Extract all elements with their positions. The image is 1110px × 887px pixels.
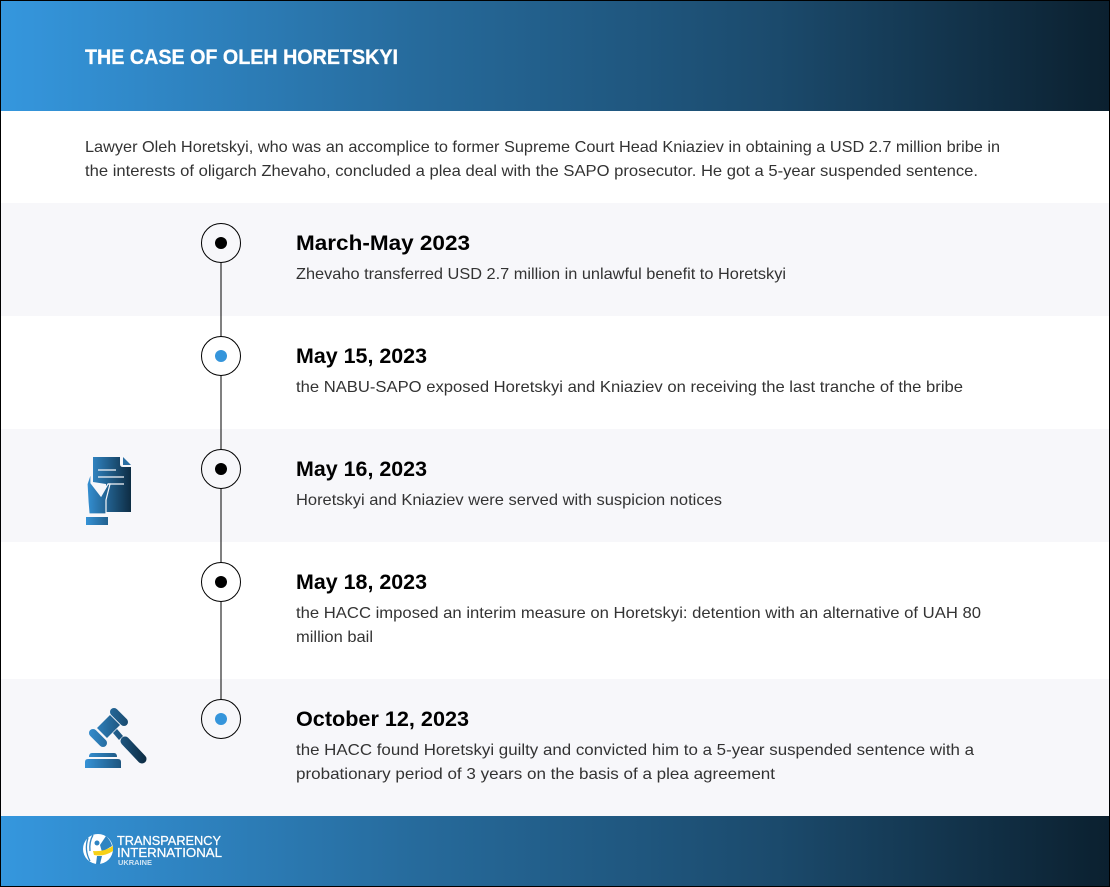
- event: March-May 2023: [296, 232, 786, 283]
- panel: header banner: [0, 0, 1110, 111]
- title: THE CASE OF OLEH HORETSKYI: [85, 46, 398, 69]
- event: March-May 2023: March-May 2023: [296, 232, 470, 255]
- panel: row backgrounds: [0, 203, 1110, 816]
- logo: Transparency International Ukraine: UKRAINE: [118, 860, 152, 867]
- intro text: [85, 139, 1000, 180]
- panel: footer banner: [0, 816, 1110, 887]
- event: May 15, 2023: [296, 345, 963, 396]
- event: May 16, 2023: [296, 458, 722, 509]
- timeline marker: May 18, 2023: [202, 562, 240, 602]
- icon: judge gavel: [85, 712, 142, 768]
- event: October 12, 2023: [296, 708, 974, 783]
- timeline marker: May 16, 2023: [202, 450, 240, 488]
- event: May 18, 2023: May 18, 2023: [296, 571, 427, 594]
- event: October 12, 2023: the HACC found Horetskyi guilty and convicted him to a 5-year suspended sentence with a: [296, 742, 974, 759]
- event: May 15, 2023: May 15, 2023: [296, 345, 427, 368]
- timeline line: [220, 243, 222, 719]
- event: May 16, 2023: Horetskyi and Kniaziev were served with suspicion notices: [296, 492, 722, 509]
- logo: Transparency International Ukraine: TRANSPARENCY: [117, 834, 222, 848]
- event: May 16, 2023: May 16, 2023: [296, 458, 427, 481]
- timeline marker: March-May 2023: [202, 224, 240, 262]
- icon: hand holding document: [86, 457, 131, 525]
- logo: Transparency International Ukraine: [83, 834, 222, 867]
- timeline marker: May 15, 2023: [202, 336, 240, 376]
- event: May 18, 2023: million bail: [296, 629, 373, 646]
- event: May 18, 2023: the HACC imposed an interim measure on Horetskyi: detention with an alternative of UAH 80: [296, 605, 981, 622]
- event: May 18, 2023: [296, 571, 981, 646]
- event: May 15, 2023: the NABU-SAPO exposed Horetskyi and Kniaziev on receiving the last tranche of the bribe: [296, 379, 963, 396]
- logo: Transparency International Ukraine: INTERNATIONAL: [117, 846, 222, 860]
- intro text: the interests of oligarch Zhevaho, concluded a plea deal with the SAPO prosecutor. He got a 5-year suspended sentence.: [85, 163, 978, 180]
- event: October 12, 2023: probationary period of 3 years on the basis of a plea agreement: [296, 766, 776, 783]
- event: October 12, 2023: October 12, 2023: [296, 708, 469, 731]
- timeline marker: October 12, 2023: [202, 700, 240, 738]
- event: March-May 2023: Zhevaho transferred USD 2.7 million in unlawful benefit to Horetskyi: [296, 266, 786, 283]
- intro text: Lawyer Oleh Horetskyi, who was an accomplice to former Supreme Court Head Kniaziev in obtaining a USD 2.7 million bribe in: [85, 139, 1000, 156]
